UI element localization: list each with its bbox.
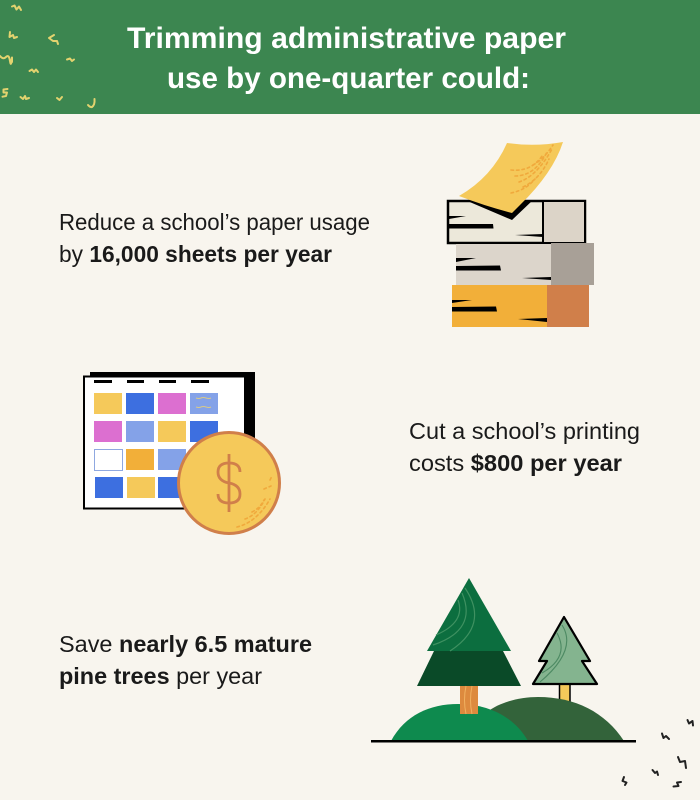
paper speckles	[511, 145, 553, 193]
icon: paper and stack of books	[448, 142, 594, 327]
black squiggles	[622, 720, 693, 786]
calendar back	[90, 372, 255, 462]
big tree lower tier	[417, 651, 521, 686]
ground line	[371, 740, 636, 742]
calendar right shadow	[245, 376, 255, 446]
calendar page	[84, 376, 245, 508]
title: Trimming administrative paper	[127, 22, 566, 55]
middle book	[456, 243, 594, 285]
text: pine trees: Save nearly 6.5 mature	[59, 631, 312, 657]
coin	[178, 432, 280, 534]
tree rings	[433, 588, 475, 651]
text: printing costs: Cut a school’s printing	[409, 418, 640, 444]
text: pine trees: pine trees per year	[59, 663, 262, 689]
coin speckles	[237, 476, 272, 527]
header ticks	[94, 380, 209, 383]
dark hill	[487, 697, 624, 741]
sheet of paper	[459, 142, 563, 213]
text: paper usage: Reduce a school’s paper usage	[59, 209, 370, 235]
big tree top tier	[427, 578, 511, 651]
icon: calendar with coin	[84, 372, 280, 534]
text: paper usage	[59, 209, 370, 267]
header banner	[0, 0, 700, 114]
black fold shadow	[465, 200, 533, 220]
title	[127, 22, 566, 95]
calendar cells	[94, 393, 218, 498]
title: use by one-quarter could:	[167, 62, 530, 95]
small tree	[533, 617, 597, 684]
green hill	[391, 704, 528, 741]
yellow squiggles	[0, 6, 95, 107]
small tree trunk	[560, 684, 570, 702]
big tree trunk	[460, 686, 478, 714]
text: pine trees	[59, 631, 312, 689]
icon: trees on hills	[371, 578, 636, 742]
text: printing costs: costs $800 per year	[409, 450, 622, 476]
text: paper usage: by 16,000 sheets per year	[59, 241, 332, 267]
bottom book	[452, 285, 589, 327]
top book	[448, 201, 585, 243]
text: printing costs	[409, 418, 640, 476]
dollar sign	[218, 454, 240, 512]
